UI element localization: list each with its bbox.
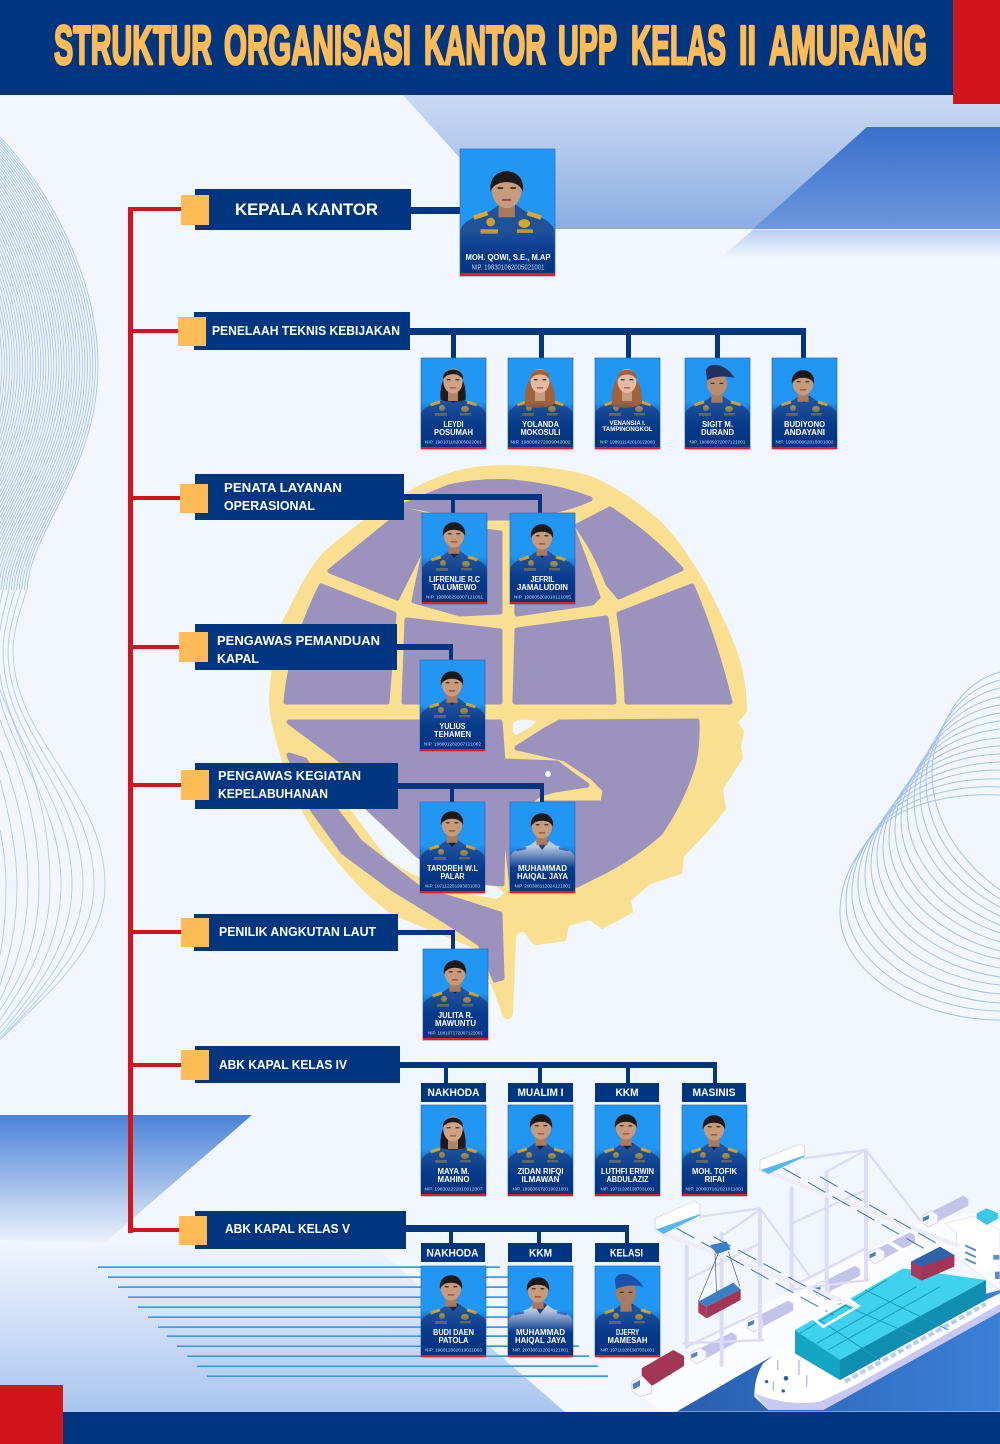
role tag: masinis: MASINIS: [692, 1087, 736, 1099]
card: Yulius Tehamen: [420, 660, 485, 751]
title: KELAS: [631, 14, 726, 76]
label: penelaah teknis kebijakan: PENELAAH TEKNIS KEBIJAKAN: [212, 323, 400, 338]
label: penilik angkutan laut: PENILIK ANGKUTAN LAUT: [219, 924, 376, 939]
crane front: [683, 1208, 810, 1365]
role tag: mualim i: MUALIM I: [518, 1087, 564, 1099]
card: Sigit M. Durand: [685, 358, 750, 449]
hanging container: [698, 1242, 741, 1318]
card: Muhammad Haiqal Jaya: MUHAMMAD: [518, 864, 567, 873]
label: pengawas kegiatan kepelabuhanan: [181, 763, 398, 809]
label: abk kapal kelas iv: [181, 1046, 400, 1083]
label: penilik angkutan laut: [181, 914, 398, 951]
card: Venansia Tampinongkol: TAMPINONGKOL: [602, 426, 653, 433]
label: abk kapal kelas iv: ABK KAPAL KELAS IV: [219, 1057, 347, 1072]
card: Maya M. Mahino: MAHINO: [438, 1175, 470, 1184]
navy connectors: [397, 207, 806, 1244]
background: horizontal lines: [98, 1266, 608, 1377]
card: Leydi Posumah: NIP. 198101182005022001: [425, 440, 482, 446]
role tag: nakhoda kelas iv: NAKHODA: [428, 1087, 480, 1099]
card: Budiyono Andayani: BUDIYONO: [784, 420, 825, 429]
role tag: kelasi: [595, 1243, 659, 1262]
title: ORGANISASI: [224, 14, 411, 76]
logo: ministry of transportation emblem: [270, 466, 746, 1018]
card: Djefry Mamesah: MAMESAH: [608, 1336, 648, 1345]
role tag: nakhoda kelas v: [421, 1243, 485, 1262]
right wave pattern: [840, 672, 1000, 1020]
card: Moh. Qowi: MOH. QOWI, S.E., M.AP: [466, 252, 551, 262]
bottom band: [63, 1412, 1000, 1444]
card: Venansia Tampinongkol: NIP. 198911142010122003: [600, 440, 655, 446]
background: bottom-left reflection: [0, 1240, 565, 1412]
card: Jefril Jamaluddin: JAMALUDDIN: [517, 583, 568, 592]
card: Sigit M. Durand: DURAND: [701, 428, 734, 437]
card: Taroreh W.L Palar: [420, 802, 485, 893]
card: Maya M. Mahino: [421, 1105, 486, 1196]
card: Muhammad Haiqal Jaya (KKM): MUHAMMAD: [516, 1328, 565, 1337]
background: top-right reflection: [720, 230, 1000, 258]
title: [54, 14, 927, 76]
card: Julita R. Mawuntu: NIP. 198107172007122001: [428, 1030, 483, 1036]
crane cabins: [655, 1144, 804, 1234]
card: Julita R. Mawuntu: MAWUNTU: [435, 1019, 476, 1028]
card: Yulius Tehamen: TEHAMEN: [434, 730, 471, 739]
card: Leydi Posumah: LEYDI: [444, 420, 464, 429]
trucks: [691, 1196, 968, 1364]
title: KANTOR: [424, 14, 546, 76]
card: Zidan Rifqi Ilmawan: [508, 1105, 573, 1196]
card: Moh. Tofik Rifai: RIFAI: [704, 1175, 724, 1184]
card: Luthfi Erwin Abdulaziz: ABDULAZIZ: [606, 1175, 649, 1184]
role tag: mualim i: [508, 1083, 573, 1102]
card: Zidan Rifqi Ilmawan: NIP. 199606172019021001: [512, 1186, 569, 1192]
label: penelaah teknis kebijakan: [178, 312, 410, 350]
title band: [0, 0, 953, 95]
card: Taroreh W.L Palar: NIP. 197112251993031003: [425, 884, 480, 890]
label: penata layanan operasional: PENATA LAYANAN: [224, 480, 342, 495]
card: Lifrenlie R.C Talumewo: [422, 513, 487, 604]
card: Moh. Tofik Rifai: MOH. TOFIK: [692, 1167, 737, 1176]
ship-side container: [911, 1247, 954, 1281]
title: II: [739, 14, 756, 76]
card: Budiyono Andayani: [772, 358, 837, 449]
label: kepala kantor: [181, 189, 411, 230]
card: Budi Daen Patola: BUDI DAEN: [433, 1328, 474, 1337]
role tag: kkm kelas iv: [595, 1083, 659, 1102]
label: pengawas pemanduan kapal: KAPAL: [217, 651, 259, 666]
red corner top: [953, 0, 1000, 104]
label: pengawas kegiatan kepelabuhanan: KEPELABUHANAN: [218, 786, 328, 801]
ship hull: [754, 1293, 1000, 1410]
crane booms: [653, 1168, 962, 1327]
card: Yolanda Mokosuli: YOLANDA: [522, 420, 559, 429]
logo: white bird notch and eye: [513, 720, 551, 777]
card: Taroreh W.L Palar: PALAR: [440, 872, 465, 881]
card: Jefril Jamaluddin: NIP. 198805202010121005: [514, 594, 571, 600]
card: Julita R. Mawuntu: JULITA R.: [438, 1011, 473, 1020]
role tag: kkm kelas v: KKM: [529, 1248, 552, 1260]
card: Budi Daen Patola: NIP. 196012062019021003: [425, 1348, 482, 1354]
card: Yolanda Mokosuli: NIP. 198008272009042002: [510, 440, 571, 446]
card: Sigit M. Durand: NIP. 198809272007121001: [690, 440, 746, 446]
card: Jefril Jamaluddin: [510, 513, 575, 604]
card: Zidan Rifqi Ilmawan: ZIDAN RIFQI: [518, 1167, 564, 1176]
card: Djefry Mamesah: NIP. 197110281987031001: [600, 1348, 655, 1354]
title: UPP: [558, 14, 617, 76]
label: penata layanan operasional: [180, 474, 404, 520]
left wave pattern: [0, 137, 105, 1040]
label: pengawas pemanduan kapal: PENGAWAS PEMANDUAN: [217, 633, 380, 648]
background: top-right dark shape: [753, 127, 1000, 229]
card: Luthfi Erwin Abdulaziz: [595, 1105, 660, 1196]
card: Moh. Qowi: [460, 149, 555, 276]
background: bottom-left triangle: [0, 1115, 252, 1247]
role tag: kkm kelas v: [508, 1243, 572, 1262]
card: Luthfi Erwin Abdulaziz: NIP. 197110261987031001: [600, 1186, 655, 1192]
card: Budiyono Andayani: NIP. 199000062015001002: [776, 440, 834, 446]
card: Djefry Mamesah: DJEFRY: [616, 1328, 640, 1337]
card: Moh. Tofik Rifai: NIP. 200007162021011001: [686, 1186, 744, 1192]
red spine connector: [128, 207, 183, 1233]
card: Muhammad Haiqal Jaya: NIP. 200306112024121001: [514, 884, 571, 890]
card: Julita R. Mawuntu: [423, 949, 488, 1040]
ship and port illustration: [630, 1144, 1000, 1412]
red corner bottom: [0, 1385, 63, 1444]
card: Budi Daen Patola: PATOLA: [438, 1336, 469, 1345]
water: [673, 1290, 1000, 1412]
card: Venansia Tampinongkol: [595, 358, 660, 449]
containers: [795, 1268, 986, 1380]
label: pengawas pemanduan kapal: [179, 624, 397, 670]
card: Yulius Tehamen: NIP. 198601282007121002: [424, 742, 481, 748]
quay: [630, 1213, 1000, 1412]
card: Muhammad Haiqal Jaya (KKM): HAIQAL JAYA: [515, 1336, 566, 1345]
card: Jefril Jamaluddin: JEFRIL: [530, 575, 555, 584]
card: Leydi Posumah: POSUMAH: [434, 428, 473, 437]
label: penata layanan operasional: OPERASIONAL: [224, 498, 315, 513]
label: pengawas kegiatan kepelabuhanan: PENGAWAS KEGIATAN: [218, 768, 361, 783]
role tag: nakhoda kelas iv: [421, 1083, 486, 1102]
background: top-right light band: [403, 95, 1000, 229]
card: Moh. Qowi: NIP. 198301062005021001: [472, 264, 545, 272]
card: Lifrenlie R.C Talumewo: LIFRENLIE R.C: [429, 575, 480, 584]
logo: white crescent: [340, 765, 504, 899]
card: Yolanda Mokosuli: [508, 358, 573, 449]
label: abk kapal kelas v: [179, 1211, 406, 1249]
card: Yulius Tehamen: YULIUS: [440, 722, 466, 731]
card: Taroreh W.L Palar: TAROREH W.L: [427, 864, 478, 873]
card: Djefry Mamesah: [595, 1266, 660, 1357]
label: abk kapal kelas v: ABK KAPAL KELAS V: [225, 1221, 350, 1236]
role tag: kelasi: KELASI: [610, 1248, 643, 1260]
card: Maya M. Mahino: NIP. 198302222010012007: [424, 1186, 483, 1192]
card: Maya M. Mahino: MAYA M.: [438, 1167, 470, 1176]
building: [945, 1208, 1000, 1290]
card: Lifrenlie R.C Talumewo: NIP. 198008292007121001: [426, 594, 483, 600]
card: Yolanda Mokosuli: MOKOSULI: [520, 428, 560, 437]
card: Leydi Posumah: [421, 358, 486, 449]
card: Budiyono Andayani: ANDAYANI: [784, 428, 825, 437]
role tag: masinis: [682, 1083, 746, 1102]
card: Moh. Tofik Rifai: [682, 1105, 747, 1196]
crane back: [788, 1150, 920, 1298]
card: Luthfi Erwin Abdulaziz: LUTHFI ERWIN: [601, 1167, 654, 1176]
card: Muhammad Haiqal Jaya (KKM): [508, 1266, 573, 1357]
card: Budi Daen Patola: [421, 1266, 486, 1357]
card: Venansia Tampinongkol: VENANSIA I.: [610, 420, 646, 427]
card: Lifrenlie R.C Talumewo: TALUMEWO: [432, 583, 476, 592]
role tag: kkm kelas iv: KKM: [616, 1087, 638, 1099]
title: STRUKTUR: [54, 14, 212, 76]
card: Muhammad Haiqal Jaya: HAIQAL JAYA: [517, 872, 568, 881]
red truck: [632, 1350, 684, 1397]
card: Zidan Rifqi Ilmawan: ILMAWAN: [522, 1175, 560, 1184]
label: kepala kantor: KEPALA KANTOR: [235, 200, 378, 219]
role tag: nakhoda kelas v: NAKHODA: [426, 1248, 479, 1260]
card: Muhammad Haiqal Jaya: [510, 802, 575, 893]
card: Muhammad Haiqal Jaya (KKM): NIP. 200306112024121001: [512, 1348, 569, 1354]
card: Sigit M. Durand: SIGIT M.: [702, 420, 733, 429]
